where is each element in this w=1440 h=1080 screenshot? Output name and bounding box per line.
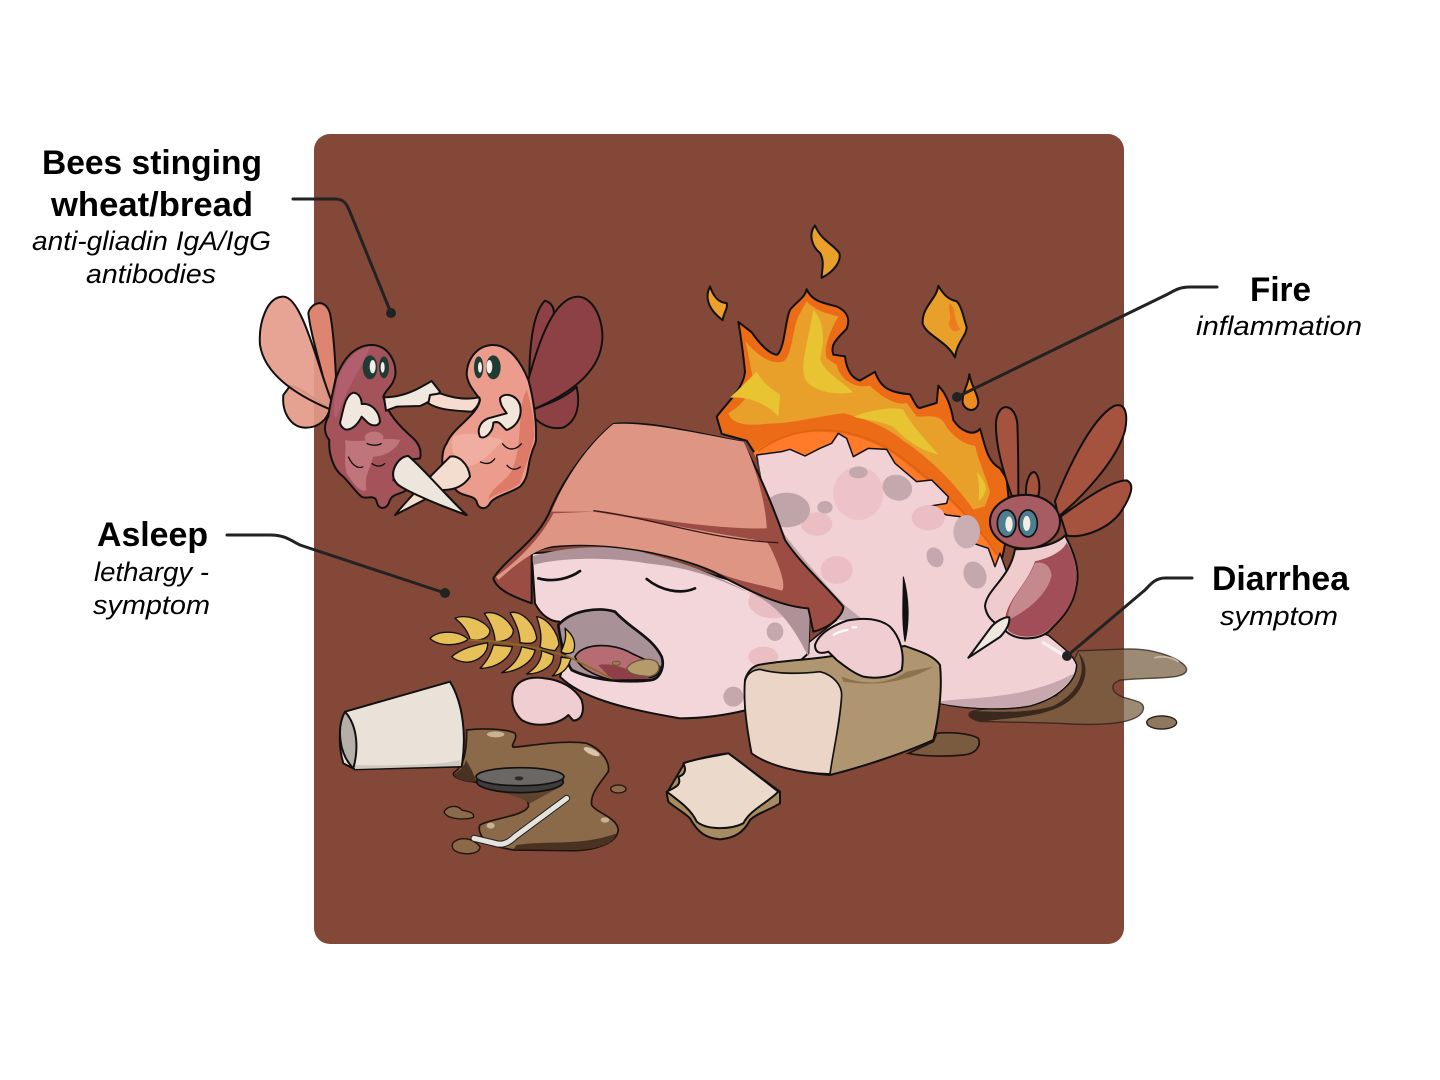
hand resting on bread	[815, 619, 903, 678]
label: fire: inflammation	[1196, 311, 1362, 341]
icon: flames on the back	[717, 289, 1009, 568]
mouth: open mouth with food	[558, 609, 663, 681]
label: bees stinging wheat/bread	[32, 144, 271, 289]
icon: wheat stalk	[430, 612, 612, 678]
mouth, hand and wheat stalk	[430, 609, 663, 725]
hand under the chin	[512, 678, 583, 725]
character: sleeping face	[532, 547, 810, 718]
icon: flying flame embers	[707, 225, 978, 410]
label: diarrhea	[1212, 560, 1350, 631]
bee: right salmon bee	[393, 297, 602, 515]
label: diarrhea: symptom	[1220, 601, 1338, 631]
drops	[444, 806, 474, 819]
leader line: fire	[952, 287, 1217, 402]
hat: pink bucket hat and face	[493, 423, 843, 718]
label: bees stinging wheat/bread: Bees stinging	[42, 144, 262, 182]
leader line: bees	[293, 199, 396, 318]
label: fire	[1196, 271, 1362, 341]
bee: left dark bee	[260, 297, 467, 515]
hat shape	[493, 423, 843, 632]
label: asleep: symptom	[93, 590, 210, 620]
label: bees stinging wheat/bread: antibodies	[86, 259, 216, 289]
leader line: diarrhea	[1062, 578, 1192, 661]
puddle: diarrhea puddle under the body	[969, 649, 1187, 729]
icon: bitten toast slice	[667, 753, 780, 839]
label: diarrhea: Diarrhea	[1212, 560, 1350, 598]
label: asleep: Asleep	[97, 516, 208, 554]
bee: right bee on the tail	[968, 405, 1131, 658]
spilled drink: puddle, cup, lid and straw	[340, 682, 626, 854]
puddle: spilled drink	[453, 729, 618, 851]
bread: loaf of bread with hand and puddle	[745, 619, 979, 775]
label: asleep: lethargy -	[94, 557, 209, 587]
character: pink body back	[757, 433, 1077, 709]
label: bees stinging wheat/bread: anti-gliadin IgA/IgG	[32, 226, 271, 256]
bread loaf	[745, 646, 941, 775]
label: bees stinging wheat/bread: wheat/bread	[50, 186, 253, 224]
leader line: asleep	[227, 535, 450, 598]
icon: cup	[340, 682, 464, 769]
icon: straw	[474, 798, 567, 844]
label: fire: Fire	[1250, 271, 1311, 309]
label: asleep	[93, 516, 210, 620]
puddle: small puddle behind the bread	[908, 733, 979, 756]
panel: brown background	[314, 134, 1124, 944]
icon: cup lid	[477, 771, 563, 793]
